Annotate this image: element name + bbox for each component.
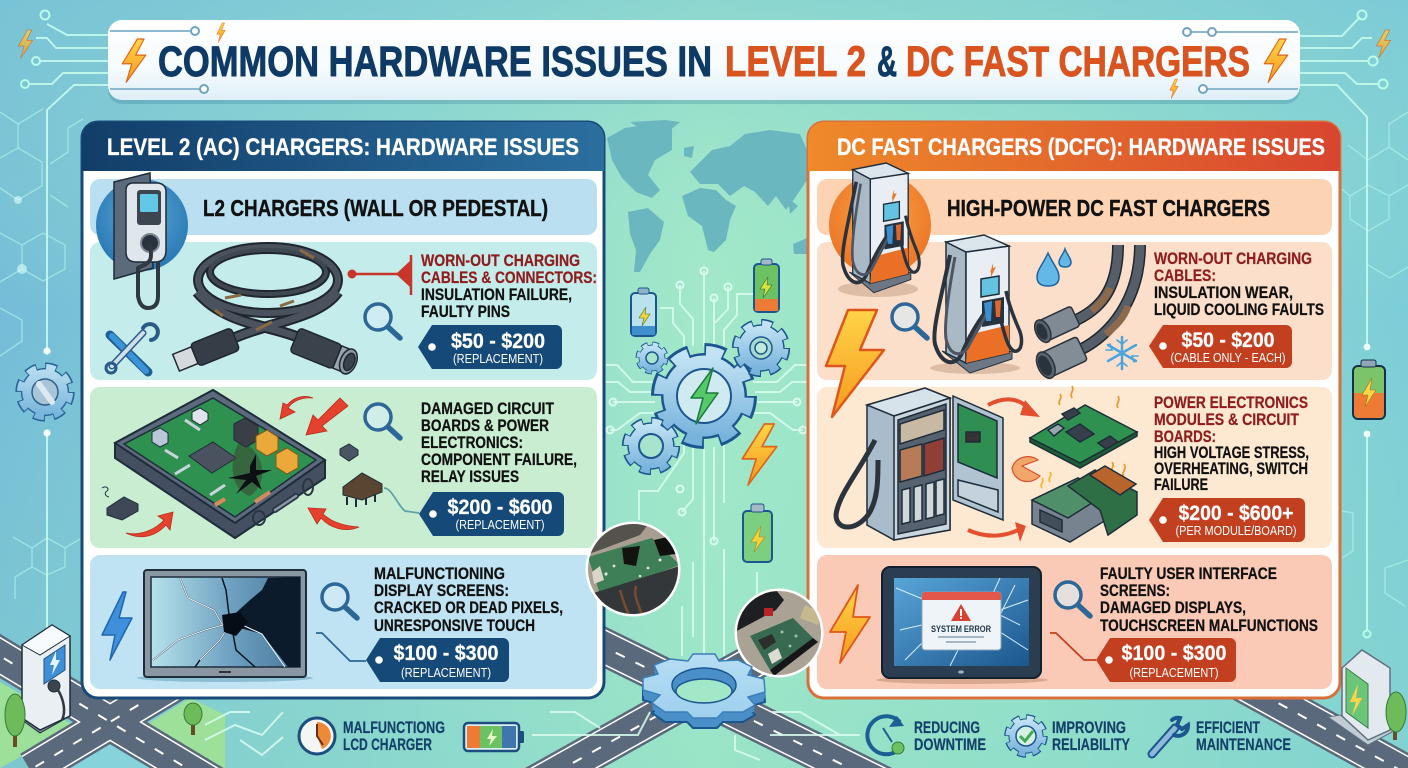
footer item: malfunctioning LCD charger: MALFUNCTIONG [343,718,445,737]
icon: roadside charger left [22,625,70,733]
title text: & [877,38,897,86]
price tag: (REPLACEMENT) [401,665,491,680]
text: damaged circuit boards: DAMAGED CIRCUIT [421,400,554,418]
row: worn-out cables [90,173,597,380]
panel: Level 2 AC chargers [82,122,604,698]
price tag: $200 - $600+ [1178,502,1294,525]
sub-heading row: L2 chargers [90,179,597,235]
price tag: $50 - $200 [451,330,545,353]
text: power electronics: OVERHEATING, SWITCH [1154,460,1308,478]
text: worn-out cables: CABLES & CONNECTORS: [421,269,597,287]
price tag: (REPLACEMENT) [453,351,543,366]
icon: title bolt left [122,39,146,82]
circuit traces: central hub [606,268,807,660]
icon: tools [106,324,158,373]
text: malfunctioning displays: MALFUNCTIONING [374,565,505,583]
price tag: (REPLACEMENT) [456,517,544,532]
background hexagon pattern: left [0,109,83,599]
circuit traces: title right [1300,10,1388,638]
footer item: malfunctioning LCD charger [299,718,445,754]
icon: wall charger [96,173,188,308]
icon: snowflake [1106,337,1138,369]
icon: cracked monitor [137,570,313,682]
icon: wrench [1152,718,1188,754]
text: damaged circuit boards: BOARDS & POWER [421,417,549,435]
price tag [1149,325,1292,368]
text: worn-out cables: INSULATION WEAR, [1154,284,1293,302]
text: power electronics: BOARDS: [1154,428,1216,446]
price tag [1096,638,1236,682]
glow nodes: left [14,196,27,274]
text: power electronics: POWER ELECTRONICS [1154,394,1308,412]
text: power electronics [1154,394,1309,494]
row: damaged circuit boards [90,387,597,548]
row: faulty UI screens [817,555,1332,689]
title text: LEVEL 2 [725,38,866,86]
icon: charger unit [930,235,1021,374]
photo: damaged board right [734,588,825,680]
connector line [384,488,419,513]
icon: heat spark [1012,457,1040,482]
footer item: reducing downtime: DOWNTIME [914,735,986,754]
text: faulty UI screens: SCREENS: [1100,582,1170,600]
icon: gear left side [21,368,69,416]
text: damaged circuit boards: COMPONENT FAILURE, [421,451,577,469]
icon: tablet with system error [876,567,1048,684]
panel: DC fast chargers [808,122,1340,698]
icon: small bolt [217,23,225,43]
text: malfunctioning displays: CRACKED OR DEAD PIXELS, [374,599,563,617]
row: power electronics [817,386,1332,548]
icon: loose components [102,444,382,520]
footer item: efficient maintenance [1152,718,1291,754]
title text: COMMON HARDWARE ISSUES IN [158,38,712,86]
icon: tablet with system error: SYSTEM ERROR [931,624,991,635]
panel heading: DC FAST CHARGERS (DCFC): HARDWARE ISSUES [837,134,1325,161]
icon: tree left [5,694,25,747]
icon: battery green and orange [754,259,779,312]
row: malfunctioning displays [90,555,597,689]
price tag: $100 - $300 [394,642,498,665]
icon: bolt top left [18,30,33,58]
icon: tree middle [184,703,202,735]
icon: circuit board [1030,405,1137,468]
text: damaged circuit boards: RELAY ISSUES [421,468,519,486]
text: worn-out cables: WORN-OUT CHARGING [421,252,580,270]
icon: magnifier [365,404,400,438]
icon: tree right [1386,692,1406,740]
icon: clock [299,718,335,754]
icon: magnifier [365,304,400,338]
text: worn-out cables: FAULTY PINS [421,303,510,321]
text: power electronics: MODULES & CIRCUIT [1154,411,1299,429]
circuit traces: title left [21,10,108,640]
text: worn-out cables [1154,250,1324,319]
text: malfunctioning displays [374,565,563,635]
icon: open power cabinet [836,388,1003,540]
icon: red arrows [968,399,1030,536]
footer item: reducing downtime: REDUCING [914,718,980,737]
row: worn-out cables [817,163,1332,381]
icon: battery right side [1353,360,1385,419]
road network [0,629,1408,768]
price tag: $50 - $200 [1182,329,1274,352]
icon: bolt orange [742,424,777,485]
footer item: improving reliability: IMPROVING [1052,718,1126,737]
icon: gear small left [639,345,665,371]
text: worn-out cables: CABLES: [1154,267,1216,285]
text: faulty UI screens: DAMAGED DISPLAYS, [1100,599,1246,617]
price tag: $200 - $600 [448,496,552,519]
connector line [1050,633,1096,660]
text: faulty UI screens: FAULTY USER INTERFACE [1100,565,1277,583]
icon: worn DC cables [1031,245,1140,381]
sub-heading row: L2 chargers: L2 CHARGERS (WALL OR PEDESTAL) [203,195,548,221]
icon: footer battery [464,723,524,751]
icon: heat waves [1041,386,1125,488]
connector line [316,633,366,661]
price tag: (REPLACEMENT) [1130,665,1218,680]
price tag [419,492,564,536]
footer item: efficient maintenance: EFFICIENT [1196,718,1260,737]
callout pointer [348,255,411,295]
footer item: reducing downtime [867,716,986,754]
panel heading [82,122,604,171]
icon: title bolt right [1264,39,1288,82]
icon: gear lower left [627,422,675,470]
icon: bolt top right [1376,30,1391,58]
icon: blue bolt [102,592,132,660]
panel heading: LEVEL 2 (AC) CHARGERS: HARDWARE ISSUES [107,134,579,161]
arrowheads [1015,400,1040,542]
photo: damaged board left [586,522,680,616]
text: malfunctioning displays: UNRESPONSIVE TOUCH [374,617,535,635]
icon: gear with check [1008,718,1044,754]
footer item: improving reliability [1008,718,1130,754]
price tag: $100 - $300 [1122,642,1226,665]
icon: big yellow bolt [826,310,884,417]
footer item: malfunctioning LCD charger: LCD CHARGER [343,735,432,754]
sub-heading row: high-power chargers [817,179,1332,235]
text: worn-out cables: LIQUID COOLING FAULTS [1154,301,1324,319]
icon: magnifier [322,584,357,618]
text: worn-out cables: INSULATION FAILURE, [421,286,572,304]
icon: bottom 3D gear [643,654,765,728]
icon: small bolt right [1170,79,1178,99]
price tag [366,638,509,682]
text: power electronics: HIGH VOLTAGE STRESS, [1154,444,1309,462]
icon: magnifier [892,304,927,338]
footer item: efficient maintenance: MAINTENANCE [1196,735,1291,754]
title text: DC FAST CHARGERS [906,38,1250,86]
text: damaged circuit boards [421,400,577,486]
title text [158,38,1250,86]
icon: red arrows [126,396,359,537]
text: power electronics: FAILURE [1154,476,1208,494]
footer item: improving reliability: RELIABILITY [1052,735,1130,754]
price tag: (CABLE ONLY - EACH) [1170,350,1286,365]
price tag [1149,498,1305,542]
title banner [108,20,1300,104]
icon: damaged charging cable [172,247,361,377]
text: faulty UI screens: TOUCHSCREEN MALFUNCTIONS [1100,617,1318,635]
text: faulty UI screens [1100,565,1318,635]
icon: central gear with bolt [661,353,747,439]
panel heading [808,122,1340,171]
icon: charger in orange circle [829,163,931,297]
text: damaged circuit boards: ELECTRONICS: [421,434,523,452]
icon: cracked circuit board enclosure [115,390,325,538]
icon: gear upper right [737,324,785,372]
sub-heading row: high-power chargers: HIGH-POWER DC FAST CHARGERS [947,195,1270,221]
icon: water drops [1037,249,1071,286]
icon: cycle clock [867,716,904,754]
text: worn-out cables: WORN-OUT CHARGING [1154,250,1312,268]
background hexagon pattern: right [1342,112,1408,606]
icon: battery blue [631,288,656,336]
icon: battery green [743,504,772,562]
icon: roadside charger right [1328,650,1392,745]
text: worn-out cables [421,252,597,321]
icon: orange bolt [830,585,870,663]
icon: magnifier [1055,582,1090,616]
price tag [418,325,562,369]
text: malfunctioning displays: DISPLAY SCREENS: [374,582,509,600]
price tag: (PER MODULE/BOARD) [1176,523,1296,538]
decorative circuit bottom [205,712,860,760]
icon: overheating module [1032,466,1137,542]
world map [607,120,807,272]
